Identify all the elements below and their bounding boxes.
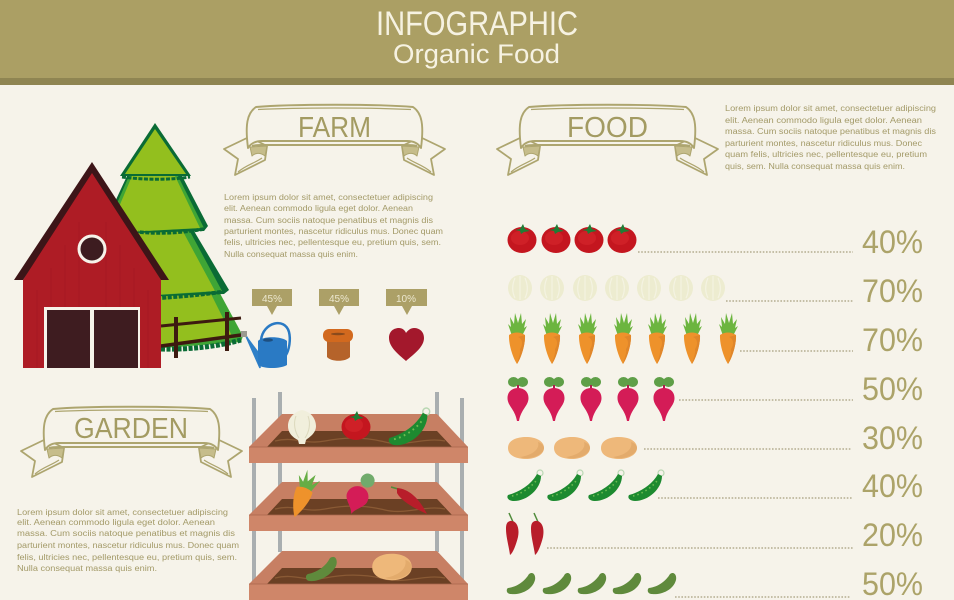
- illustration: red barn: [14, 162, 169, 368]
- text block: food: quam felis, ultricies nec, pellentesque eu, pretium: [725, 150, 927, 159]
- row: carrots 70%: 70%: [862, 322, 923, 358]
- row: chilies 20%: [506, 513, 923, 555]
- illustration: fence: [161, 312, 241, 358]
- text block: food: quis, sem. Nulla consequat massa quis enim.: [725, 162, 905, 171]
- illustration: garden shelves: [249, 392, 468, 600]
- title: INFOGRAPHIC: [376, 5, 578, 43]
- top tier: [120, 123, 191, 176]
- shelf tomato: [342, 411, 370, 440]
- row: tomatoes 40%: [508, 224, 923, 260]
- barn window: [79, 236, 105, 262]
- banner: garden: GARDEN: [74, 413, 188, 445]
- third tier: [110, 226, 229, 298]
- icon: watering can: [241, 323, 290, 368]
- shelf three: [249, 551, 468, 600]
- text block: food: elit. Aenean commodo ligula eget dolor. Aenean: [725, 116, 922, 125]
- banner: food: FOOD: [567, 112, 648, 144]
- shelf cucumber: [306, 557, 337, 581]
- shelf pea: [389, 408, 430, 445]
- text block: food: massa. Cum sociis natoque penatibus et magnis dis: [725, 127, 936, 136]
- text block: garden: [17, 508, 239, 573]
- icon: flower pot: [323, 329, 353, 361]
- shelf potato: [372, 554, 412, 580]
- text block: farm: [224, 193, 443, 259]
- banner: garden: [21, 407, 242, 477]
- shelf carrot: [285, 468, 322, 521]
- row: chilies 20%: 20%: [862, 517, 923, 553]
- text block: garden: massa. Cum sociis natoque penatibus et magnis dis: [17, 529, 235, 538]
- callout: 10% love: [386, 289, 427, 315]
- row: cucumbers 50%: [507, 566, 923, 600]
- row: onions 70%: 70%: [862, 273, 923, 309]
- banner: farm: FARM: [298, 112, 371, 144]
- text block: garden: felis, ultricies nec, pellentesque eu, pretium quis, sem.: [17, 553, 237, 562]
- header band: [0, 0, 954, 85]
- row: peas 40%: [507, 468, 923, 504]
- shelf chili: [391, 487, 427, 514]
- callout: 45% water: [252, 289, 292, 315]
- text block: garden: Lorem ipsum dolor sit amet, consectetuer adipiscing: [17, 508, 228, 517]
- shelf posts: [252, 392, 464, 588]
- banner: farm: [224, 105, 445, 175]
- callout: 10% love: 10%: [396, 294, 416, 305]
- callout: 45% soil: 45%: [329, 294, 349, 305]
- barn door: [44, 307, 140, 368]
- row: peas 40%: 40%: [862, 468, 923, 504]
- shelf two: [249, 482, 468, 531]
- text block: food: parturient montes, nascetur ridiculus mus. Donec: [725, 139, 922, 148]
- text block: garden: parturient montes, nascetur ridiculus mus. Donec quam: [17, 541, 239, 550]
- shelf onion: [288, 410, 316, 444]
- row: onions 70%: [508, 273, 923, 309]
- text block: farm: Lorem ipsum dolor sit amet, consectetuer adipiscing: [224, 193, 433, 202]
- shelf beet: [341, 469, 377, 518]
- row: tomatoes 40%: 40%: [862, 224, 923, 260]
- banner: food: [497, 105, 718, 175]
- text block: garden: elit. Aenean commodo ligula eget dolor. Aenean: [17, 518, 215, 527]
- subtitle: Organic Food: [393, 39, 560, 69]
- text block: farm: parturient montes, nascetur ridiculus mus. Donec quam: [224, 227, 443, 236]
- lowest tier: [110, 286, 243, 352]
- text block: farm: Nulla consequat massa quis enim.: [224, 250, 358, 259]
- callout: 45% water: 45%: [262, 294, 282, 305]
- illustration: pine tree: [100, 123, 243, 352]
- row: beets 50%: 50%: [862, 371, 923, 407]
- callout: 45% soil: [319, 289, 359, 315]
- shelf one: [249, 414, 468, 463]
- text block: farm: elit. Aenean commodo ligula eget dolor. Aenean: [224, 204, 413, 213]
- row: potatoes 30%: [508, 420, 923, 459]
- second tier: [100, 176, 208, 234]
- text block: food: Lorem ipsum dolor sit amet, consectetuer adipiscing: [725, 104, 936, 113]
- text block: farm: massa. Cum sociis natoque penatibus et magnis dis: [224, 216, 433, 225]
- text block: farm: felis, ultricies nec, pellentesque eu, pretium quis, sem.: [224, 238, 441, 247]
- text block: food: [725, 104, 936, 171]
- text block: garden: Nulla consequat massa quis enim.: [17, 564, 157, 573]
- row: carrots 70%: [508, 313, 923, 364]
- row: potatoes 30%: 30%: [862, 420, 923, 456]
- icon: heart: [389, 328, 424, 361]
- row: beets 50%: [508, 371, 923, 421]
